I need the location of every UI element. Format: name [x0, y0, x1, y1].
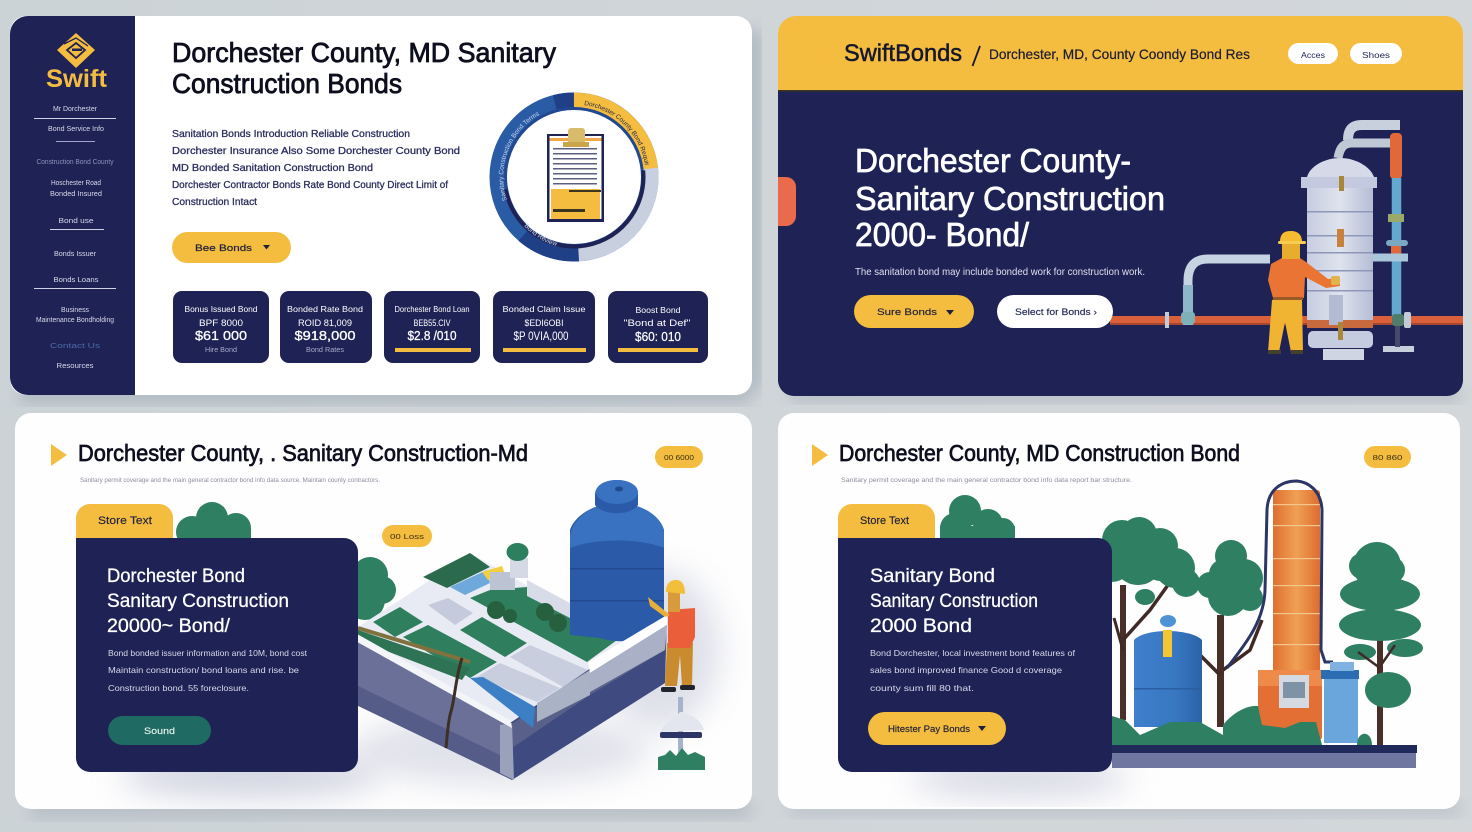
- subtitle: Sanitary permit coverage and the main general contractor bond info data source. Maintain county contractors.: [80, 477, 380, 484]
- tab: [838, 504, 935, 545]
- sidebar: [10, 16, 135, 395]
- small wind vane: [658, 697, 705, 770]
- panel: tower illustration: [778, 413, 1460, 809]
- sidebar navigation: [34, 106, 116, 370]
- orange tower: [1258, 490, 1322, 740]
- cable: [1227, 481, 1333, 668]
- heading: Dorchester County, . Sanitary Construction-Md: [78, 440, 528, 466]
- tab: [76, 504, 173, 545]
- sidebar navigation: Construction Bond County: [36, 159, 114, 166]
- tank: [1301, 158, 1377, 360]
- base platform: [1112, 745, 1417, 768]
- icon: bond document clipboard: [547, 128, 604, 222]
- brand name: Swift: [46, 65, 108, 93]
- card 3: [384, 291, 480, 363]
- body text: [172, 128, 460, 208]
- card 4: [493, 291, 595, 363]
- donut labels: [498, 100, 650, 246]
- heading: Dorchester County, MD Sanitary: [172, 37, 556, 68]
- bond cards: [173, 291, 708, 363]
- sidebar navigation: Maintenance Bondholding: [36, 317, 114, 324]
- side tab: [778, 177, 796, 226]
- storage tank: [570, 480, 664, 641]
- divider slash: [972, 46, 980, 66]
- badge: 00 6000: [664, 453, 694, 462]
- badge: [655, 446, 703, 468]
- body text: Dorchester Insurance Also Some Dorchester County Bond: [172, 145, 460, 157]
- card 1: [173, 291, 269, 363]
- blue tank: [1134, 615, 1202, 727]
- sidebar navigation: Business: [61, 307, 89, 314]
- heading: Construction Bonds: [172, 68, 402, 99]
- tree 2: [1197, 540, 1263, 727]
- tab: Store Text: [98, 515, 152, 527]
- front bushes: [1223, 706, 1372, 745]
- tree 1: [1092, 517, 1200, 720]
- sidebar navigation: Bonded Insured: [50, 191, 102, 198]
- card text: Bond bonded issuer information and 10M, bond cost: [108, 648, 308, 658]
- tree behind tab: [176, 502, 251, 548]
- button: bond form: [868, 712, 1006, 745]
- hero heading: Dorchester County-: [855, 142, 1131, 179]
- card 5: $60: 010: [635, 330, 681, 344]
- heading: [172, 37, 556, 99]
- card heading: Dorchester Bond: [107, 566, 245, 587]
- card heading: 2000 Bond: [870, 616, 972, 637]
- card 1: $61 000: [195, 328, 247, 343]
- card heading: [870, 566, 1038, 637]
- hero text: The sanitation bond may include bonded work for construction work.: [855, 267, 1145, 278]
- card text: [870, 648, 1076, 693]
- card 4: $EDI6OBI: [524, 318, 564, 329]
- sidebar navigation: Bonds Loans: [54, 277, 99, 284]
- badge: 80 860: [1372, 453, 1402, 462]
- card 5: Boost Bond: [636, 305, 681, 315]
- worker: [648, 580, 695, 692]
- button: see details: [172, 232, 291, 263]
- panel: bond overview: [10, 16, 752, 395]
- sign: [1279, 675, 1309, 708]
- floating badge: [382, 525, 432, 547]
- bushes on ground: [487, 601, 567, 632]
- card 4: $P 0VIA,000: [514, 331, 568, 343]
- body text: Construction Intact: [172, 196, 257, 208]
- card 1: Bonus Issued Bond: [184, 304, 258, 314]
- wall top: [588, 615, 667, 673]
- button: search: [108, 716, 211, 745]
- button: secondary: Select for Bonds ›: [1015, 307, 1097, 318]
- brown beam and cable: [358, 628, 470, 748]
- badge: [1364, 446, 1411, 468]
- card 2: Bond Rates: [306, 347, 345, 354]
- illustration: tower, tank and trees: [1092, 481, 1423, 768]
- card heading: Sanitary Bond: [870, 566, 995, 587]
- right wall: [510, 616, 667, 780]
- icon: Swift logo: [57, 33, 95, 68]
- sidebar navigation: Hoschester Road: [51, 180, 101, 187]
- bushes: [1112, 716, 1223, 745]
- illustration: treatment site: [345, 480, 705, 780]
- tree: [345, 557, 396, 620]
- donut labels: Bond Review: [524, 223, 558, 246]
- illustration: pipe tank and worker: [1110, 125, 1463, 360]
- card 2: [280, 291, 372, 363]
- header breadcrumb: Dorchester, MD, County Coondy Bond Res: [989, 46, 1250, 62]
- card text: [108, 648, 308, 693]
- sidebar navigation: Mr Dorchester: [53, 106, 98, 113]
- card text: Construction bond. 55 foreclosure.: [108, 683, 249, 693]
- marker triangle: [812, 444, 828, 466]
- card text: sales bond improved finance Good d coverage: [870, 665, 1062, 675]
- floating badge: 00 Loss: [390, 532, 424, 541]
- sidebar navigation: Bond Service Info: [48, 126, 104, 133]
- card text: county sum fill 80 that.: [870, 683, 974, 693]
- panel: hero: [778, 16, 1463, 396]
- donut chart: [490, 92, 658, 262]
- button: see details: Bee Bonds: [195, 243, 252, 254]
- body text: MD Bonded Sanitation Construction Bond: [172, 162, 373, 174]
- sidebar navigation: Contact Us: [50, 343, 101, 350]
- button: bond form: Hitester Pay Bonds: [888, 724, 971, 734]
- card 5: "Bond at Def": [624, 318, 690, 329]
- header pills: Shoes: [1362, 51, 1390, 60]
- card heading: Sanitary Construction: [107, 591, 289, 612]
- card 2: ROID 81,009: [298, 318, 352, 329]
- card 4: Bonded Claim Issue: [502, 304, 586, 314]
- hero heading: [855, 142, 1165, 253]
- info card: [838, 538, 1112, 772]
- card 3: Dorchester Bond Loan: [394, 304, 470, 314]
- card text: Bond Dorchester, local investment bond features of: [870, 648, 1076, 658]
- button: primary: Sure Bonds: [877, 307, 937, 318]
- card text: Maintain construction/ bond loans and rise. be: [108, 665, 299, 675]
- card heading: Sanitary Construction: [870, 591, 1038, 612]
- card 2: Bonded Rate Bond: [287, 304, 363, 314]
- header pills: Acces: [1301, 51, 1325, 60]
- tab: Store Text: [860, 515, 909, 527]
- marker triangle: [51, 444, 67, 466]
- header pills: [1288, 43, 1402, 64]
- card 1: Hire Bond: [205, 347, 237, 354]
- button: secondary: [997, 295, 1113, 328]
- blue box: [1321, 662, 1359, 743]
- card heading: [107, 566, 289, 637]
- tree 3: [1339, 542, 1423, 745]
- card 2: $918,000: [294, 328, 356, 343]
- left wall: [350, 632, 512, 780]
- shadow of card and slab: [120, 753, 380, 797]
- pipes behind tank: [1338, 125, 1400, 158]
- heading: Dorchester County, MD Construction Bond: [839, 440, 1240, 466]
- body text: Sanitation Bonds Introduction Reliable Construction: [172, 128, 410, 140]
- card shadow: [910, 760, 1130, 796]
- subtitle: Sanitary permit coverage and the main general contractor bond info data report bar structure.: [841, 477, 1132, 484]
- vent: [506, 543, 528, 578]
- button: primary: [854, 295, 974, 328]
- body text: Dorchester Contractor Bonds Rate Bond County Direct Limit of: [172, 179, 448, 191]
- sidebar navigation: Bond use: [58, 218, 94, 225]
- ground: [350, 553, 667, 723]
- card 1: BPF 8000: [199, 318, 243, 329]
- tree behind tab: [940, 495, 1015, 543]
- info card: [76, 538, 358, 772]
- pipes: [1165, 133, 1414, 352]
- sidebar navigation: Resources: [56, 363, 94, 370]
- hero heading: 2000- Bond/: [855, 216, 1030, 253]
- card 5: [608, 291, 708, 363]
- sidebar navigation: Bonds Issuer: [54, 251, 97, 258]
- hero heading: Sanitary Construction: [855, 180, 1165, 217]
- header brand: SwiftBonds: [844, 40, 962, 67]
- card heading: 20000~ Bond/: [107, 616, 231, 637]
- panel: site illustration: [15, 413, 752, 809]
- card 3: BEB55.CIV: [414, 318, 451, 329]
- worker: [1268, 231, 1340, 354]
- button: search: Sound: [144, 726, 175, 737]
- card 3: $2.8 /010: [408, 328, 456, 343]
- donut labels: Sanitary Construction Bond Terms: [498, 112, 539, 201]
